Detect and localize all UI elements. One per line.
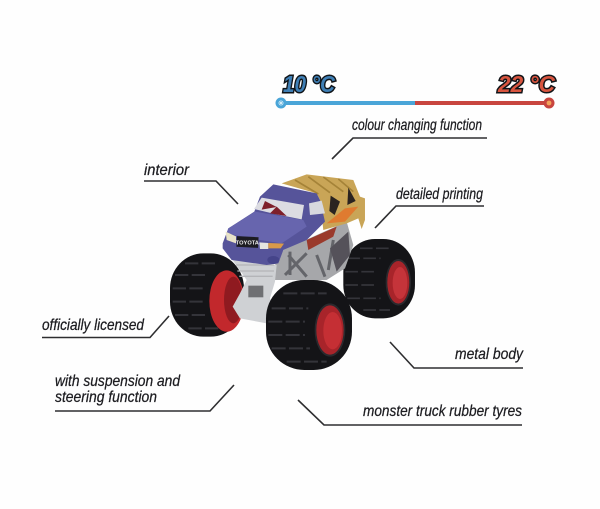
chassis [275,222,353,280]
purple body [223,184,337,265]
temperature scale [276,71,555,108]
callout: monster truck rubber tyres: monster truck rubber tyres [363,403,522,420]
warm bar [415,101,549,105]
label: 22 °C: 22 °C [497,71,555,97]
cold bar [281,101,415,105]
windows [254,198,325,219]
callout: metal body: metal body [455,346,524,363]
rear left wheel [170,253,244,337]
callout: suspension and steering: with suspension and [55,373,181,390]
label: 10 °C: 10 °C [283,71,335,97]
callout: officially licensed: officially licensed [42,317,145,334]
callout: monster truck rubber tyres [298,400,522,425]
icon: sun [544,98,554,108]
callout: interior [144,162,238,204]
rear right wheel [343,239,415,318]
icon: snowflake [276,98,286,108]
callout: colour changing function: colour changing function [352,117,482,134]
callout: suspension and steering: steering function [55,389,157,406]
callout: colour changing function [332,117,487,159]
monster truck illustration [170,174,415,370]
front right wheel [266,280,352,370]
callout: detailed printing: detailed printing [396,186,483,203]
callout: metal body [390,342,524,368]
front axle [233,260,277,323]
callout: suspension and steering [55,373,234,411]
callout: detailed printing [375,186,484,228]
tan roof and rear body [282,174,365,230]
callout: interior: interior [144,162,190,179]
headlights and toyota grille: TOYOTA [236,240,259,246]
headlights and toyota grille [226,232,284,249]
